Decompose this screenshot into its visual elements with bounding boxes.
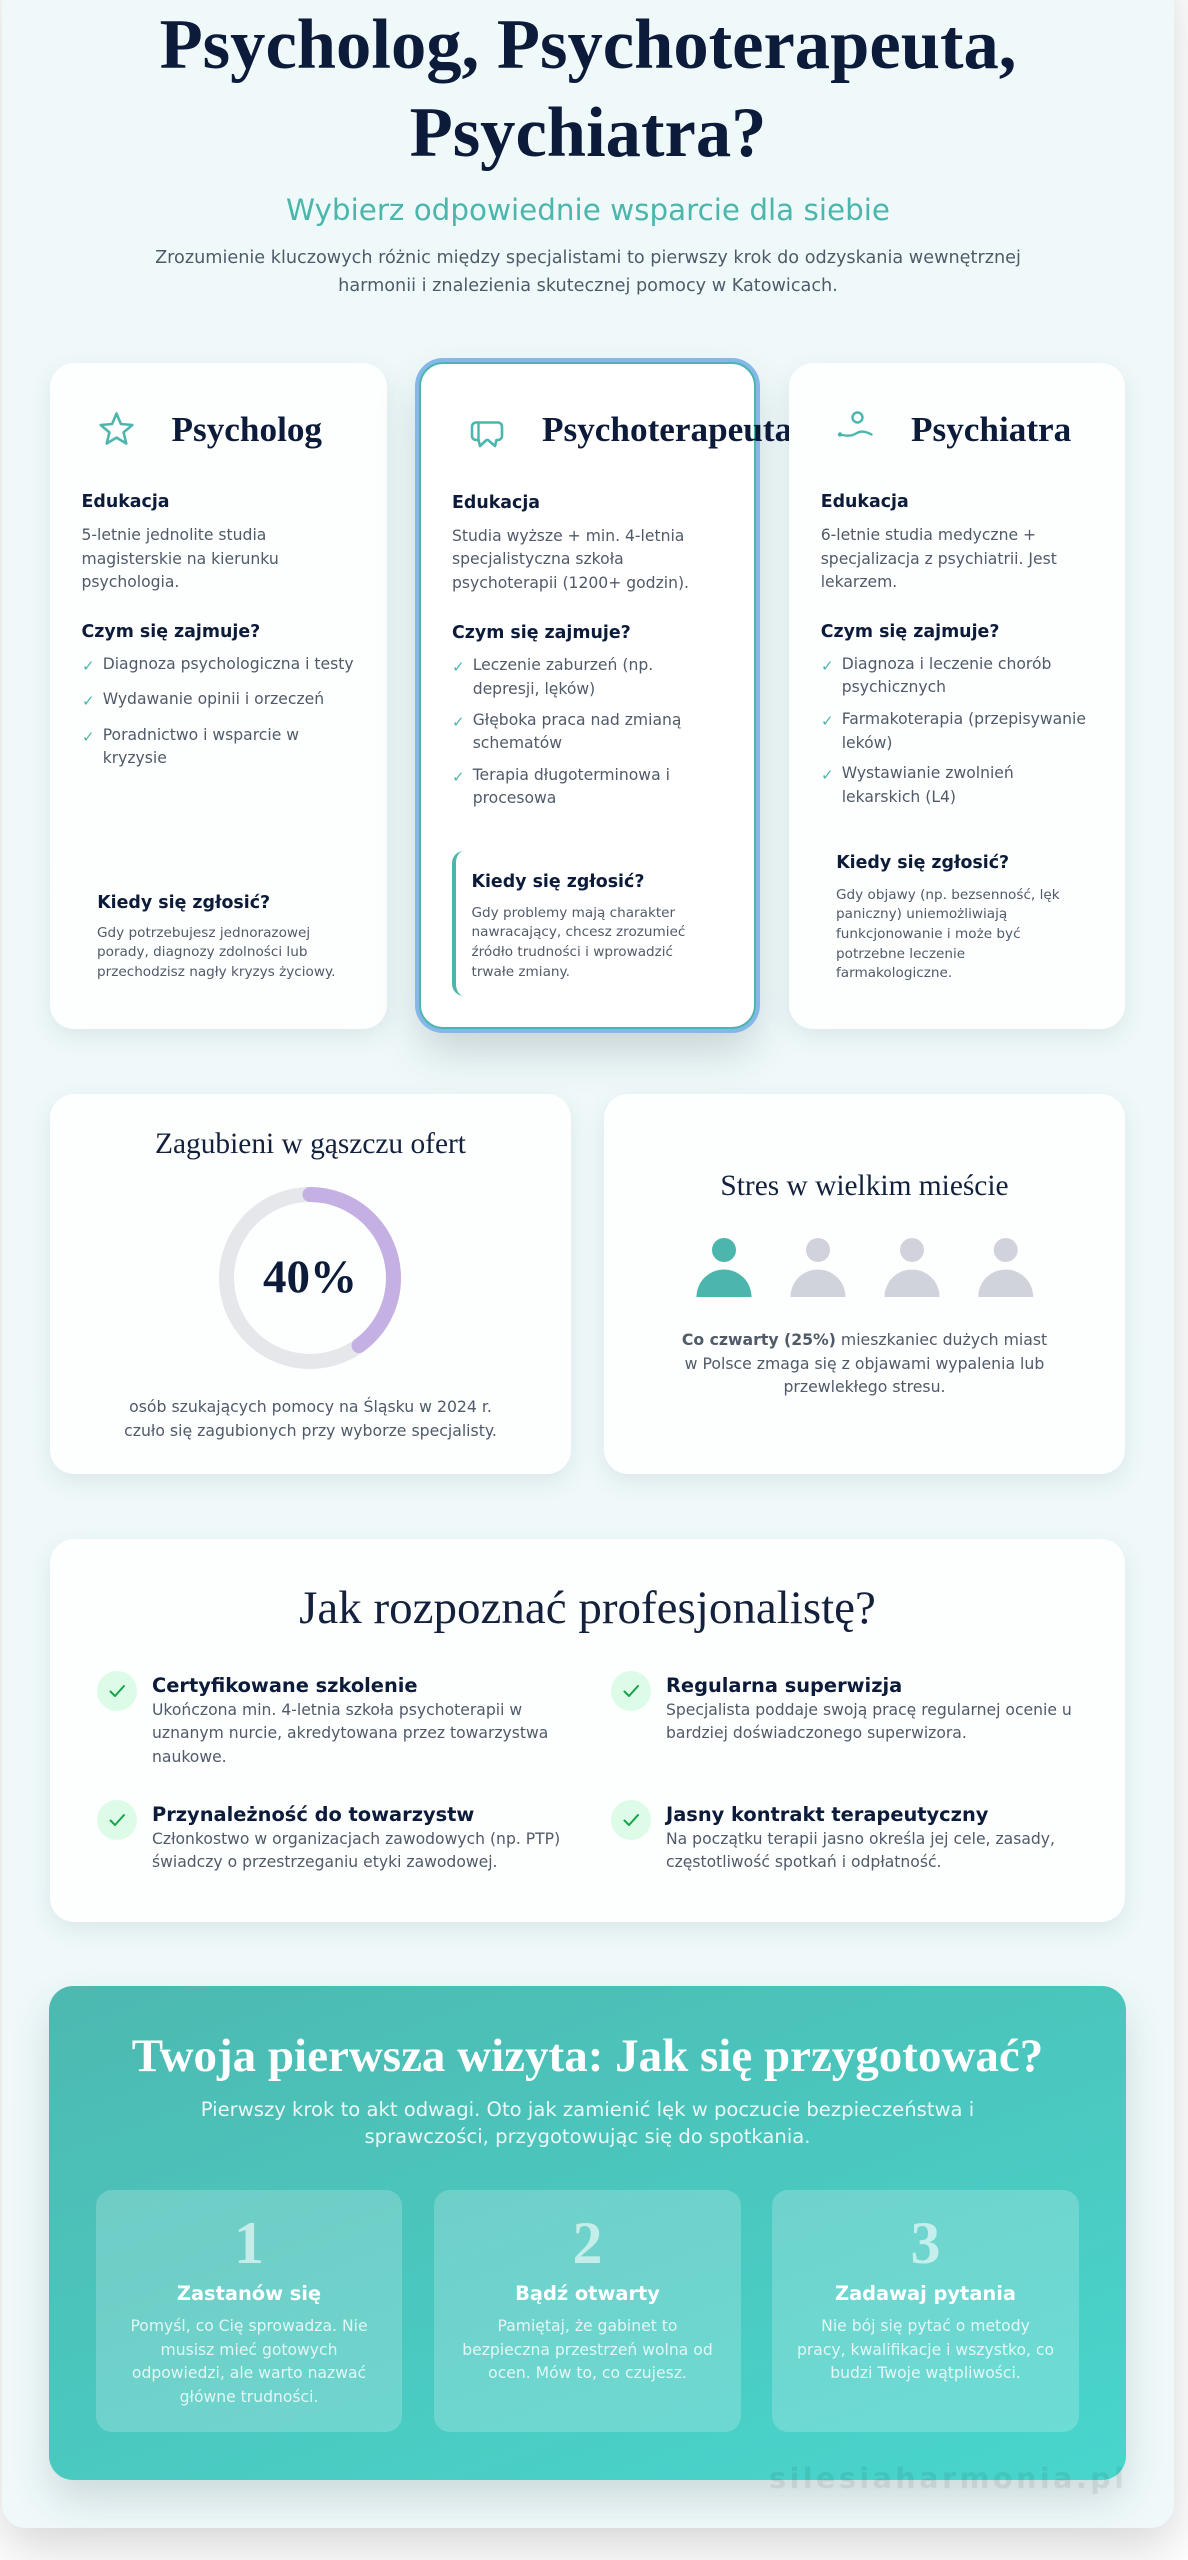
title: Psycholog, Psychoterapeuta, bbox=[160, 6, 1016, 84]
stat caption bbox=[682, 1330, 1047, 1396]
callout: when to go bbox=[97, 892, 335, 980]
callout text: Gdy potrzebujesz jednorazowej bbox=[97, 924, 310, 940]
education text: lekarzem. bbox=[821, 573, 897, 591]
panel: stat lost in offers bbox=[50, 1094, 571, 1474]
duty item: ✓ bbox=[82, 656, 95, 674]
callout text: funkcjonowanie i może być bbox=[836, 926, 1021, 942]
step text: odpowiedzi, ale warto nazwać bbox=[132, 2364, 366, 2382]
step text bbox=[797, 2317, 1054, 2382]
callout text: trwałe zmiany. bbox=[472, 964, 570, 980]
criterion text: Specjalista poddaje swoją pracę regularnej ocenie u bbox=[666, 1700, 1072, 1718]
duty item bbox=[821, 710, 1086, 752]
duty item: psychicznych bbox=[842, 678, 946, 696]
criterion text bbox=[152, 1830, 560, 1871]
icon: check bbox=[97, 1800, 137, 1840]
icon: check bbox=[97, 1671, 137, 1711]
criterion title: Certyfikowane szkolenie bbox=[152, 1674, 418, 1697]
callout text: paniczny) uniemożliwiają bbox=[836, 906, 1007, 922]
stat caption bbox=[124, 1396, 497, 1440]
intro text bbox=[155, 248, 1021, 296]
duty item: ✓ bbox=[82, 728, 95, 746]
education text bbox=[82, 526, 279, 591]
stat caption: w Polsce zmaga się z objawami wypalenia lub bbox=[685, 1354, 1044, 1373]
panel: first visit bbox=[49, 1986, 1126, 2480]
duty item: leków) bbox=[842, 734, 892, 752]
duty item bbox=[452, 656, 653, 698]
section intro: sprawczości, przygotowując się do spotkania. bbox=[364, 2125, 811, 2148]
education text bbox=[452, 526, 689, 592]
duty item bbox=[452, 711, 681, 752]
education text: psychoterapii (1200+ godzin). bbox=[452, 574, 689, 592]
education heading: Edukacja bbox=[452, 493, 540, 513]
duty item: ✓ bbox=[821, 712, 834, 730]
education text: magisterskie na kierunku bbox=[82, 550, 279, 568]
panel: psychiatra bbox=[789, 363, 1125, 1029]
stat heading: Zagubieni w gąszczu ofert bbox=[155, 1128, 466, 1160]
step text: Pamiętaj, że gabinet to bbox=[498, 2317, 677, 2335]
section heading: Jak rozpoznać profesjonalistę? bbox=[299, 1582, 876, 1634]
icon: check bbox=[611, 1800, 651, 1840]
callout text: przechodzisz nagły kryzys życiowy. bbox=[97, 964, 335, 980]
duty item: Terapia długoterminowa i bbox=[473, 766, 670, 784]
criterion text: częstotliwość spotkań i odpłatność. bbox=[666, 1853, 942, 1871]
criterion title: Jasny kontrakt terapeutyczny bbox=[666, 1803, 988, 1826]
step number: 2 bbox=[572, 2210, 602, 2276]
subtitle: Wybierz odpowiednie wsparcie dla siebie bbox=[286, 193, 890, 227]
education heading: Edukacja bbox=[82, 492, 170, 512]
duty item: depresji, lęków) bbox=[473, 680, 595, 698]
heading: psychiatra: Psychiatra bbox=[911, 410, 1071, 449]
criterion text bbox=[666, 1830, 1055, 1871]
step text: ocen. Mów to, co czujesz. bbox=[488, 2364, 687, 2382]
step text: musisz mieć gotowych bbox=[160, 2341, 337, 2359]
section heading: Twoja pierwsza wizyta: Jak się przygotować? bbox=[132, 2030, 1043, 2082]
step card 3 bbox=[772, 2190, 1079, 2432]
criterion text: bardziej doświadczonego superwizora. bbox=[666, 1724, 967, 1742]
duty item bbox=[452, 766, 670, 807]
panel: psycholog bbox=[50, 363, 387, 1029]
duty item: kryzysie bbox=[103, 749, 167, 767]
icon: chat bubbles bbox=[470, 421, 504, 448]
duty item: Diagnoza i leczenie chorób bbox=[842, 654, 1051, 672]
duty item: lekarskich (L4) bbox=[842, 788, 956, 806]
criterion text: Ukończona min. 4-letnia szkoła psychoterapii w bbox=[152, 1700, 522, 1718]
callout: when to go bbox=[452, 851, 726, 996]
duty item bbox=[821, 654, 1051, 696]
step text: główne trudności. bbox=[180, 2388, 318, 2406]
duty item: ✓ bbox=[452, 768, 465, 786]
step number: 3 bbox=[910, 2210, 940, 2276]
duty item: ✓ bbox=[821, 656, 834, 674]
step number: 1 bbox=[234, 2210, 264, 2276]
criterion title: Przynależność do towarzystw bbox=[152, 1803, 474, 1826]
step card 2 bbox=[434, 2190, 741, 2432]
callout text: źródło trudności i wprowadzić bbox=[472, 944, 673, 960]
heading: psycholog: Psycholog bbox=[172, 410, 322, 449]
callout text: Gdy problemy mają charakter bbox=[472, 904, 675, 920]
callout text bbox=[97, 924, 335, 980]
stat heading: Stres w wielkim mieście bbox=[720, 1170, 1009, 1202]
criterion text: Członkostwo w organizacjach zawodowych (np. PTP) bbox=[152, 1830, 560, 1848]
section intro: Pierwszy krok to akt odwagi. Oto jak zamienić lęk w poczucie bezpieczeństwa i bbox=[201, 2098, 974, 2121]
criterion text: świadczy o przestrzeganiu etyki zawodowej. bbox=[152, 1853, 498, 1871]
callout heading: Kiedy się zgłosić? bbox=[836, 852, 1009, 872]
step text bbox=[462, 2317, 713, 2382]
section intro bbox=[201, 2098, 974, 2148]
education text: specjalistyczna szkoła bbox=[452, 550, 624, 568]
callout: when to go bbox=[836, 852, 1060, 981]
intro text: harmonii i znalezienia skutecznej pomocy w Katowicach. bbox=[338, 276, 838, 296]
education text: Studia wyższe + min. 4-letnia bbox=[452, 526, 684, 544]
criterion text: Na początku terapii jasno określa jej cele, zasady, bbox=[666, 1830, 1055, 1848]
callout text: nawracający, chcesz zrozumieć bbox=[472, 924, 685, 940]
title: Psychiatra? bbox=[410, 94, 766, 172]
duty item: Farmakoterapia (przepisywanie bbox=[842, 710, 1086, 728]
criterion text bbox=[666, 1700, 1072, 1742]
education text: psychologia. bbox=[82, 573, 179, 591]
step text: pracy, kwalifikacje i wszystko, co bbox=[797, 2341, 1054, 2359]
duty item: Diagnoza psychologiczna i testy bbox=[103, 654, 354, 672]
duty item bbox=[821, 764, 1014, 806]
stat value: 40% bbox=[263, 1251, 357, 1303]
education text: specjalizacja z psychiatrii. Jest bbox=[821, 550, 1057, 568]
step text bbox=[130, 2317, 368, 2406]
pictogram: one in four people bbox=[696, 1238, 1034, 1297]
callout text: potrzebne leczenie bbox=[836, 946, 965, 962]
criterion title: Regularna superwizja bbox=[666, 1674, 902, 1697]
education text bbox=[821, 526, 1057, 591]
icon: star bbox=[99, 412, 134, 445]
panel: how to recognise a professional bbox=[50, 1539, 1125, 1922]
stat caption: Co czwarty (25%) mieszkaniec dużych miast bbox=[682, 1330, 1047, 1349]
step text: bezpieczna przestrzeń wolna od bbox=[462, 2341, 713, 2359]
icon: balance figure bbox=[838, 411, 873, 437]
panel: psychoterapeuta bbox=[419, 362, 756, 1029]
criterion text bbox=[152, 1700, 548, 1766]
duty item bbox=[82, 726, 299, 767]
heading: psychoterapeuta: Psychoterapeuta bbox=[542, 410, 792, 449]
stat caption: przewlekłego stresu. bbox=[783, 1377, 946, 1396]
duties heading: Czym się zajmuje? bbox=[821, 622, 999, 642]
callout heading: Kiedy się zgłosić? bbox=[472, 872, 644, 892]
callout text bbox=[836, 886, 1060, 981]
step card 1 bbox=[96, 2190, 402, 2432]
duties heading: Czym się zajmuje? bbox=[452, 622, 631, 642]
panel: stat city stress bbox=[604, 1094, 1125, 1474]
duty item: Leczenie zaburzeń (np. bbox=[473, 656, 653, 674]
donut chart: 40% bbox=[219, 1187, 401, 1369]
callout text: porady, diagnozy zdolności lub bbox=[97, 944, 307, 960]
step text: budzi Twoje wątpliwości. bbox=[830, 2364, 1021, 2382]
duty item: Wydawanie opinii i orzeczeń bbox=[103, 690, 324, 708]
education heading: Edukacja bbox=[821, 492, 909, 512]
step title: Zadawaj pytania bbox=[835, 2282, 1016, 2305]
duty item: Głęboka praca nad zmianą bbox=[473, 711, 681, 729]
duty item: ✓ bbox=[821, 766, 834, 784]
education text: 6-letnie studia medyczne + bbox=[821, 526, 1036, 544]
duty item: ✓ bbox=[452, 658, 465, 676]
stat caption: osób szukających pomocy na Śląsku w 2024 r. bbox=[129, 1397, 492, 1416]
callout text: Gdy objawy (np. bezsenność, lęk bbox=[836, 886, 1060, 902]
icon: check bbox=[611, 1671, 651, 1711]
duty item: ✓ bbox=[452, 713, 465, 731]
callout text bbox=[472, 904, 685, 980]
education text: 5-letnie jednolite studia bbox=[82, 526, 266, 544]
callout text: farmakologiczne. bbox=[836, 965, 952, 981]
step title: Bądź otwarty bbox=[515, 2282, 660, 2305]
intro text: Zrozumienie kluczowych różnic między specjalistami to pierwszy krok do odzyskania wewnętrznej bbox=[155, 248, 1021, 268]
title bbox=[160, 6, 1016, 172]
stat caption: czuło się zagubionych przy wyborze specjalisty. bbox=[124, 1420, 497, 1440]
duty item: schematów bbox=[473, 734, 562, 752]
criterion text: naukowe. bbox=[152, 1748, 227, 1766]
duty item: ✓ bbox=[82, 692, 95, 710]
callout heading: Kiedy się zgłosić? bbox=[97, 892, 270, 912]
duties heading: Czym się zajmuje? bbox=[82, 622, 260, 642]
duty item: Wystawianie zwolnień bbox=[842, 764, 1014, 782]
step title: Zastanów się bbox=[177, 2282, 321, 2305]
criterion text: uznanym nurcie, akredytowana przez towarzystwa bbox=[152, 1724, 548, 1742]
duty item: procesowa bbox=[473, 789, 556, 807]
duty item: Poradnictwo i wsparcie w bbox=[103, 726, 299, 744]
watermark: silesiaharmonia.pl bbox=[769, 2460, 1127, 2494]
step text: Nie bój się pytać o metody bbox=[821, 2317, 1030, 2335]
step text: Pomyśl, co Cię sprowadza. Nie bbox=[130, 2317, 368, 2335]
